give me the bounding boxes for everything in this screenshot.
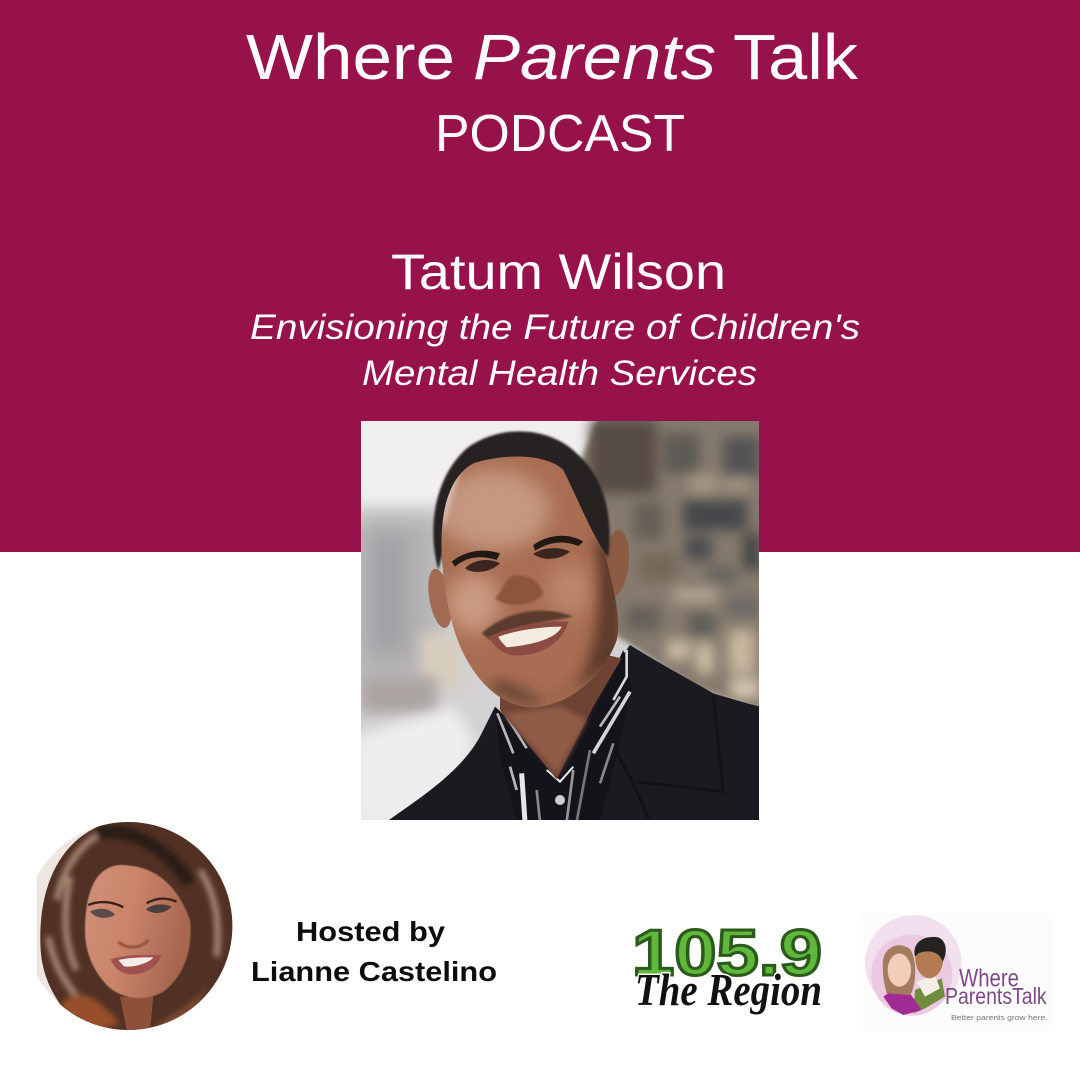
logo: Where Parents Talk bbox=[862, 913, 1054, 1032]
coat bbox=[387, 645, 760, 822]
host credit bbox=[251, 916, 497, 987]
host hair bbox=[40, 820, 235, 1033]
host nose bbox=[118, 940, 148, 947]
guest name: Tatum Wilson bbox=[391, 244, 726, 300]
logo: Where Parents Talk: Better parents grow here. bbox=[951, 1015, 1048, 1022]
host eyes bbox=[90, 909, 115, 918]
photo background: street bbox=[361, 421, 729, 820]
moustache shadow bbox=[482, 611, 573, 640]
title: Parents bbox=[473, 21, 716, 93]
logo: 105.9 The Region bbox=[632, 916, 822, 1015]
host face bbox=[85, 865, 191, 998]
striped shirt bbox=[495, 650, 632, 822]
episode title bbox=[250, 308, 860, 393]
hair bbox=[433, 431, 610, 570]
host credit: Lianne Castelino bbox=[251, 956, 497, 987]
title bbox=[246, 21, 859, 93]
title: Talk bbox=[733, 21, 859, 93]
host eyebrows bbox=[88, 899, 177, 907]
eyes bbox=[465, 560, 500, 572]
logo: Where Parents Talk: ParentsTalk bbox=[945, 983, 1047, 1009]
subtitle: podcast: PODCAST bbox=[435, 105, 685, 163]
guest photo bbox=[347, 407, 767, 827]
eyebrows bbox=[452, 551, 500, 567]
face bbox=[442, 456, 618, 708]
photo background: stone wall bbox=[580, 413, 767, 713]
smile bbox=[488, 621, 568, 655]
host smile bbox=[111, 955, 162, 974]
host credit: Hosted by bbox=[296, 916, 445, 947]
logo wordmark: Where bbox=[959, 965, 1019, 993]
neck bbox=[500, 653, 622, 779]
episode title: Envisioning the Future of Children's bbox=[250, 308, 860, 347]
coat collar bbox=[613, 695, 723, 822]
ears bbox=[428, 568, 451, 628]
logo circles bbox=[865, 915, 962, 1012]
logo couple bbox=[883, 937, 946, 1015]
episode title: Mental Health Services bbox=[362, 354, 757, 393]
host neck bbox=[120, 997, 153, 1030]
maroon header panel bbox=[0, 0, 1080, 552]
nose bbox=[495, 575, 543, 605]
logo: 105.9 The Region: 105.9 bbox=[632, 916, 822, 989]
logo: 105.9 The Region: The Region bbox=[635, 964, 822, 1015]
host portrait bbox=[33, 820, 237, 1033]
title: Where bbox=[246, 21, 455, 93]
